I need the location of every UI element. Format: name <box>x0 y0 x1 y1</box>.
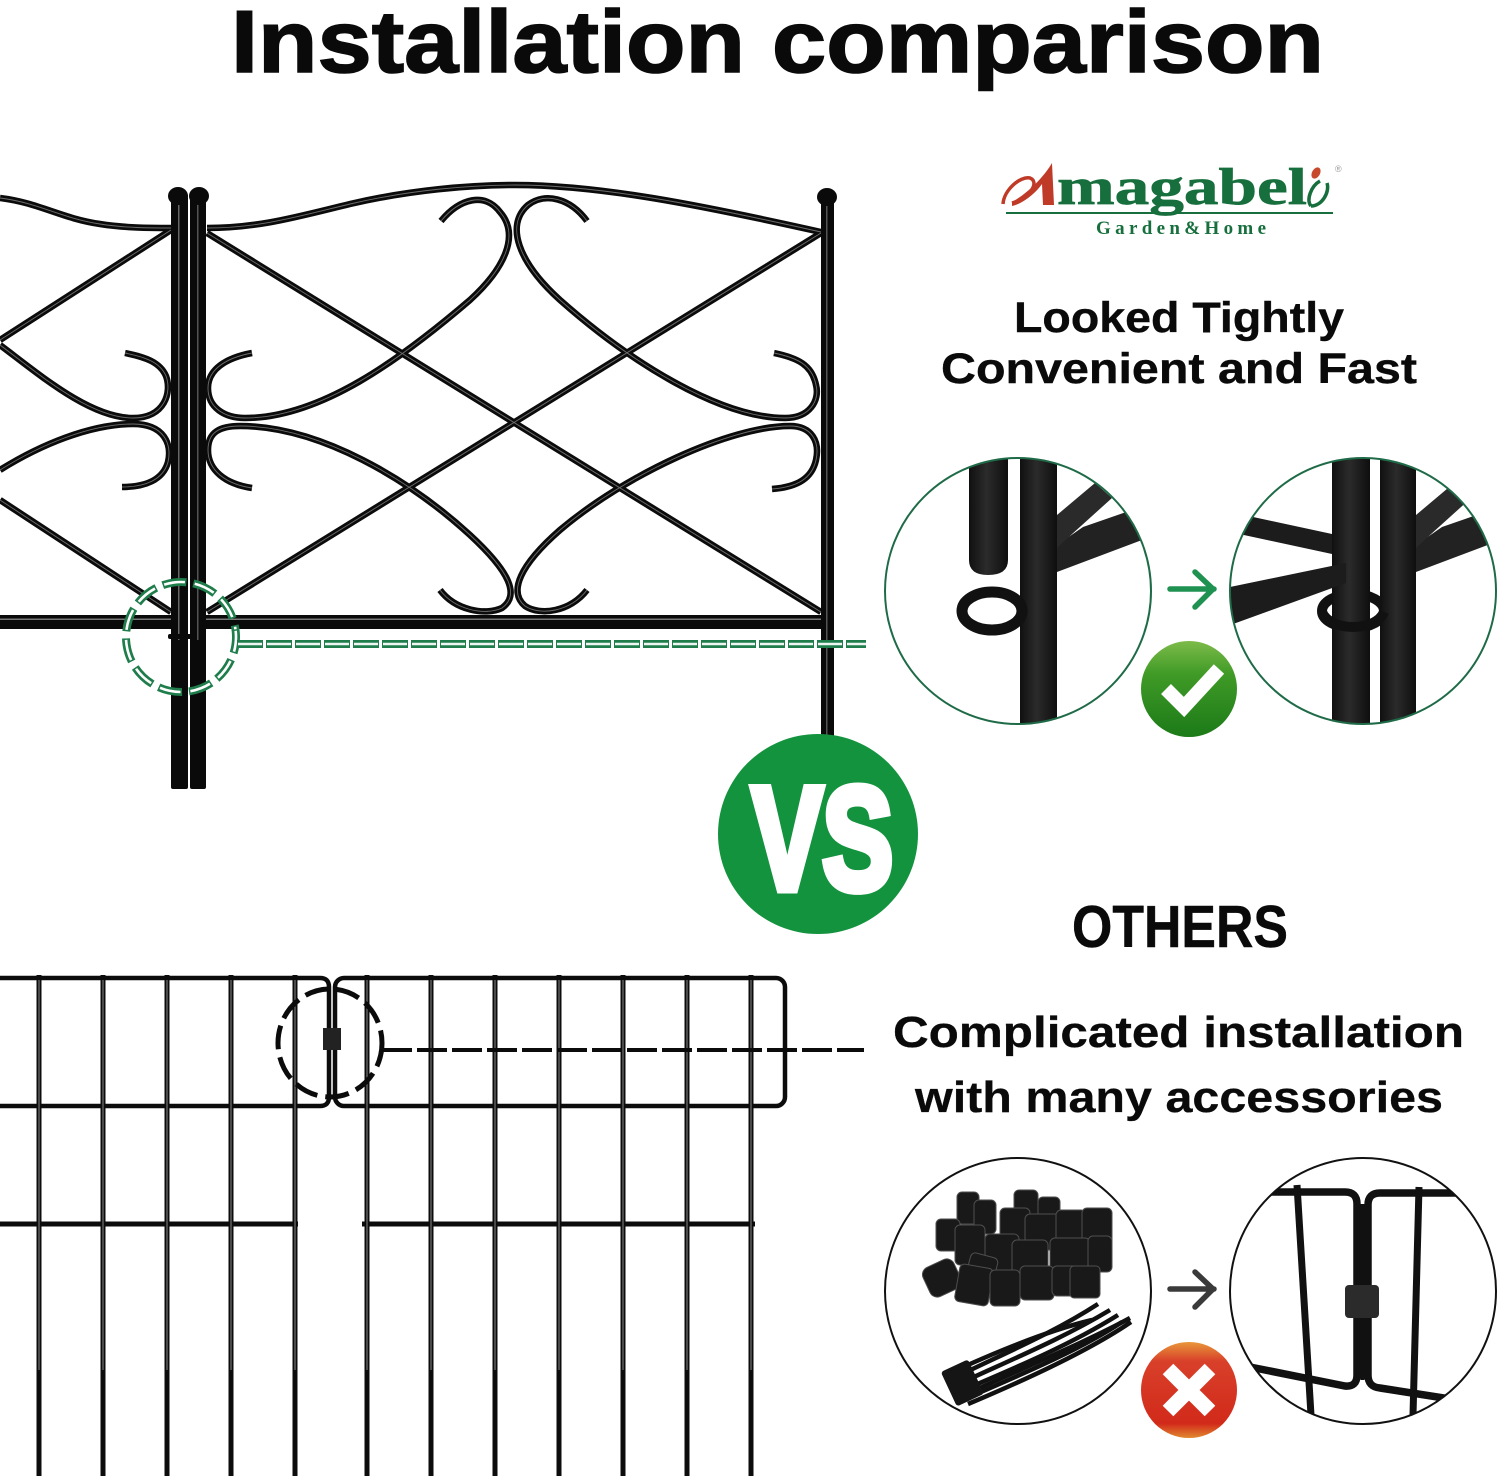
VS badge <box>718 734 918 934</box>
logo: Amagabeli Garden&Home <box>1003 159 1342 239</box>
icon: green check badge <box>1141 641 1237 737</box>
vertical stakes <box>39 975 751 1476</box>
inset: ring assembled <box>1225 450 1500 740</box>
text: complicated installation: with many accessories <box>914 1073 1443 1122</box>
black dashed callout circle and leader <box>278 989 864 1097</box>
inset: ring before assembling <box>885 450 1151 740</box>
logo: Amagabeli Garden&Home: magabel <box>1057 159 1307 216</box>
arrow: dark <box>1170 1272 1214 1307</box>
left wire panel rails <box>0 978 329 1106</box>
text: complicated installation <box>893 1008 1464 1122</box>
inset: accessories (clips and cable ties) <box>885 1158 1151 1424</box>
logo: Amagabeli Garden&Home: Garden&Home <box>1096 218 1266 239</box>
logo leaf i <box>1309 166 1328 206</box>
decorative fence: competitor wire panels <box>0 975 785 1476</box>
heading: looked tightly: Convenient and Fast <box>941 345 1417 393</box>
logo red A <box>1003 163 1054 206</box>
connector clip <box>323 1028 341 1050</box>
green dashed callout circle and leader <box>119 575 866 699</box>
plastic clips <box>920 1190 1112 1307</box>
decorative fence: Amagabeli garden fence panel <box>0 185 837 789</box>
stake highlights <box>39 980 751 1370</box>
logo: Amagabeli Garden&Home: ® <box>1335 164 1342 174</box>
cable ties <box>948 1304 1131 1404</box>
right wire panel rails <box>335 978 785 1106</box>
VS badge: VS <box>752 757 893 920</box>
icon: red cross badge <box>1141 1342 1237 1438</box>
inset: panels joined with clip <box>1230 1158 1496 1424</box>
bottom rail <box>0 615 824 629</box>
heading: looked tightly <box>941 294 1417 393</box>
arrow: green <box>1170 572 1214 607</box>
heading: looked tightly: Looked Tightly <box>1014 294 1344 342</box>
text: complicated installation: Complicated installation <box>893 1008 1464 1057</box>
lower rails <box>0 1222 755 1226</box>
fence posts <box>168 187 837 789</box>
heading: others: OTHERS <box>1072 894 1288 960</box>
